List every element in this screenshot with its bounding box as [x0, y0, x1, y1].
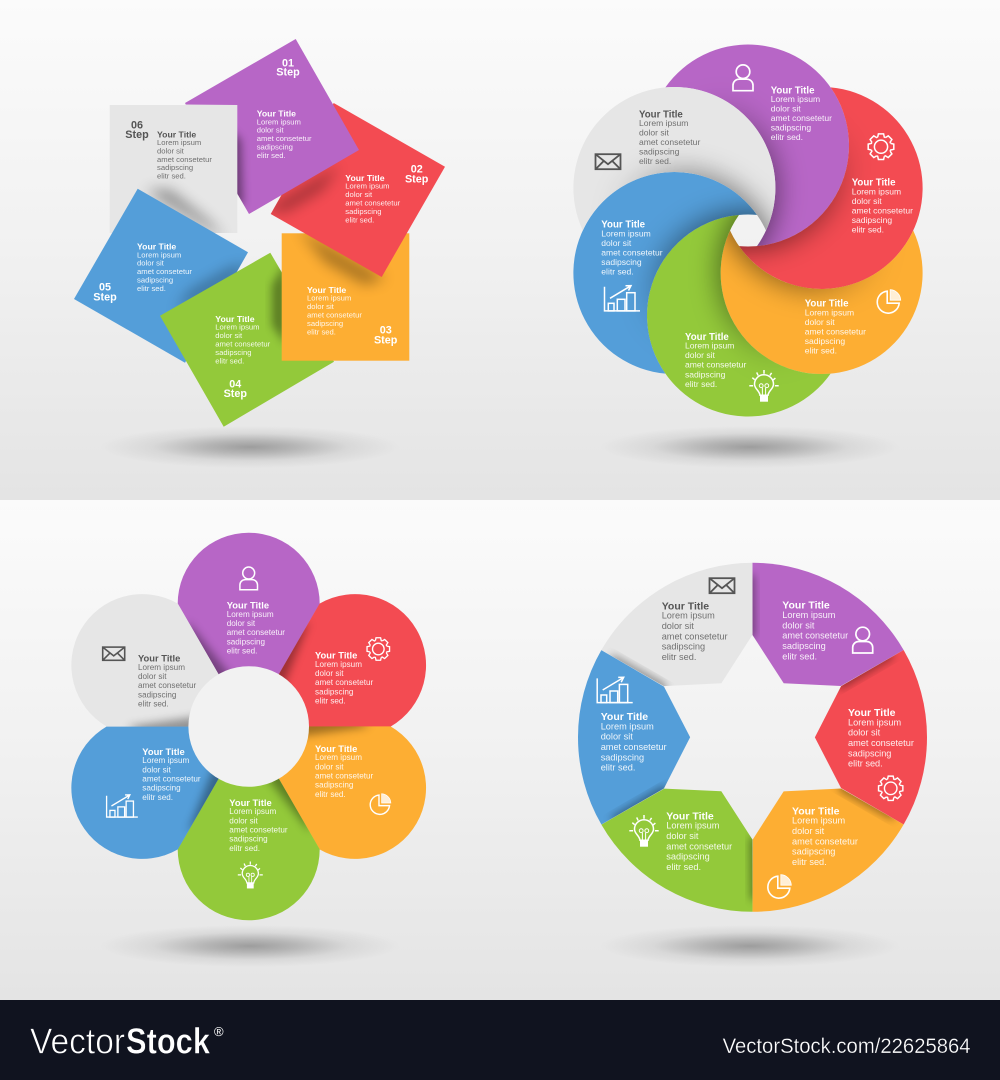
ring text: red: elitr sed.	[848, 759, 883, 769]
petal text: green: elitr sed.	[229, 844, 260, 853]
swirl segment: green: Your Title	[685, 332, 729, 343]
swirl segment: blue: sadipscing	[601, 257, 642, 267]
swirl segment: purple: Your Title	[771, 85, 815, 96]
petal text: purple: elitr sed.	[227, 647, 257, 656]
swirl segment: grey: dolor sit	[639, 127, 670, 137]
icon: gear	[879, 776, 903, 800]
swirl segment: purple: dolor sit	[771, 103, 801, 113]
petal: orange	[279, 726, 426, 859]
petal text: grey: Your Title	[138, 653, 180, 664]
step 05 blue square: 05	[99, 282, 111, 294]
step 04 green square: 04	[229, 379, 241, 391]
icon: light bulb	[749, 370, 779, 402]
ring text: grey: Lorem ipsum	[662, 611, 715, 621]
icon: light bulb	[629, 815, 659, 847]
ring segment: red	[814, 650, 927, 824]
swirl segment: red: dolor sit	[852, 196, 882, 206]
ring text: purple: elitr sed.	[782, 651, 817, 661]
ring text: green: elitr sed.	[666, 862, 701, 872]
petal text: grey: amet consetetur	[138, 681, 197, 690]
swirl segment: blue	[573, 172, 757, 374]
swirl segment: green: dolor sit	[685, 350, 716, 360]
step 04 green square: dolor sit	[215, 331, 243, 340]
ring text: orange: Your Title	[792, 805, 840, 817]
ring text: orange: amet consetetur	[792, 836, 858, 846]
step 05 blue square: Your Title	[137, 242, 176, 252]
petal text: orange: Lorem ipsum	[315, 753, 362, 762]
step 06 grey overlap and text: Lorem ipsum	[157, 138, 201, 147]
step 06 grey overlap and text: dolor sit	[157, 146, 185, 155]
step 05 blue square: Step	[93, 291, 117, 303]
swirl segment: orange	[720, 230, 923, 374]
ring text: blue: dolor sit	[601, 732, 633, 742]
ring text: green: Lorem ipsum	[666, 821, 720, 831]
footer logo: ®	[214, 1024, 224, 1039]
step 05 blue square: amet consetetur	[137, 267, 192, 276]
icon: bar chart	[604, 286, 640, 311]
step 04 green square: sadipscing	[215, 348, 251, 357]
step 03 orange square: elitr sed.	[307, 327, 336, 336]
ring text: red: sadipscing	[848, 748, 891, 758]
swirl segment: red: Lorem ipsum	[852, 186, 901, 196]
icon: user	[853, 627, 873, 653]
petal text: green: Lorem ipsum	[229, 807, 276, 816]
icon: bar chart	[597, 677, 633, 703]
petal text: blue: Your Title	[142, 746, 185, 757]
icon: gear	[868, 134, 894, 160]
step 02 red square: amet consetetur	[345, 198, 401, 207]
icon: pie chart	[370, 794, 391, 814]
petal text: orange: dolor sit	[315, 762, 344, 771]
floor shadow: top right	[600, 426, 900, 468]
icon: bar chart	[107, 795, 138, 817]
ring text: red: amet consetetur	[848, 738, 914, 748]
petal text: red: sadipscing	[315, 687, 353, 696]
step 03 orange square: Step	[374, 334, 398, 346]
step 06 grey overlap and text: elitr sed.	[157, 172, 186, 181]
step 05 blue square: dolor sit	[137, 259, 165, 268]
ring text: green: amet consetetur	[666, 841, 732, 851]
panel: segmented ring	[578, 562, 927, 912]
icon: gear	[367, 638, 390, 660]
step 04 green square: Your Title	[215, 314, 255, 324]
ring text: purple: amet consetetur	[782, 631, 848, 641]
floor shadow: top left	[100, 426, 400, 468]
ring text: orange: elitr sed.	[792, 857, 827, 867]
petal text: green: sadipscing	[229, 835, 268, 844]
swirl segment: grey	[574, 87, 776, 230]
footer url: VectorStock.com/22625864	[723, 1035, 971, 1058]
step 02 red square: 02	[411, 164, 423, 176]
step 03 orange square: amet consetetur	[307, 310, 362, 319]
footer logo	[30, 1020, 224, 1061]
icon: user	[733, 65, 753, 91]
petal text: grey: sadipscing	[138, 690, 176, 699]
ring text: red: Lorem ipsum	[848, 717, 901, 727]
swirl segment: orange: Lorem ipsum	[805, 307, 854, 317]
swirl segment: blue: amet consetetur	[601, 247, 663, 257]
step 01 purple square: Your Title	[257, 109, 296, 119]
ring text: purple: Your Title	[782, 600, 830, 612]
swirl segment: orange: Your Title	[805, 299, 849, 310]
step 01 purple square: elitr sed.	[257, 151, 286, 160]
step 06 grey overlap and text: Your Title	[157, 129, 196, 139]
swirl segment: orange: amet consetetur	[805, 326, 866, 336]
ring text: blue: Lorem ipsum	[601, 721, 654, 731]
step 04 green square	[160, 253, 334, 427]
step 03 orange square: sadipscing	[307, 319, 343, 328]
ring text: red: dolor sit	[848, 728, 881, 738]
floor shadow: bottom left	[100, 925, 400, 967]
ring text: orange: sadipscing	[792, 847, 835, 857]
icon: pie chart	[877, 290, 901, 313]
swirl segment: green: Lorem ipsum	[685, 341, 734, 351]
petal text: green: amet consetetur	[229, 826, 288, 835]
swirl segment: red	[739, 87, 923, 289]
petal text: orange: Your Title	[315, 743, 357, 754]
swirl segment: blue: Your Title	[601, 220, 646, 231]
swirl segment: red: amet consetetur	[852, 205, 913, 215]
ring segment: purple	[745, 563, 904, 686]
petal text: orange: amet consetetur	[315, 772, 374, 781]
step 03 orange square: Your Title	[307, 285, 346, 295]
swirl segment: orange: dolor sit	[805, 317, 835, 327]
ring text: blue: sadipscing	[601, 752, 644, 762]
step 02 red square	[265, 103, 445, 277]
step 03 orange square: dolor sit	[307, 302, 335, 311]
step 05 blue square: Lorem ipsum	[137, 250, 181, 259]
petal: purple	[178, 532, 320, 674]
petal text: grey: elitr sed.	[138, 700, 169, 709]
step 03 orange square: Lorem ipsum	[307, 294, 351, 303]
petal text: blue: amet consetetur	[142, 775, 201, 784]
ring text: green: sadipscing	[666, 852, 710, 862]
petal text: blue: elitr sed.	[142, 793, 173, 802]
ring text: blue: Your Title	[601, 711, 648, 723]
step 04 green square: Lorem ipsum	[215, 323, 260, 332]
icon: light bulb	[238, 862, 263, 888]
background: top half	[0, 0, 1000, 500]
swirl segment: red: sadipscing	[852, 215, 892, 225]
petal: green	[178, 778, 320, 920]
step 06 grey square	[110, 105, 237, 240]
petal text: grey: dolor sit	[138, 672, 167, 681]
petal text: purple: dolor sit	[227, 619, 256, 628]
step 05 blue square: elitr sed.	[137, 284, 166, 293]
swirl segment: green	[647, 215, 830, 416]
ring text: purple: sadipscing	[782, 641, 826, 651]
swirl segment: blue: dolor sit	[601, 238, 632, 248]
step 05 blue square: sadipscing	[137, 276, 173, 285]
swirl segment: red: elitr sed.	[852, 225, 884, 235]
petal text: red: Your Title	[315, 650, 357, 661]
swirl segment: purple	[666, 44, 849, 246]
step 06 grey overlap and text: 06	[131, 120, 143, 132]
step 04 green square: amet consetetur	[215, 339, 271, 348]
step 02 red square: dolor sit	[345, 190, 373, 199]
step 06 grey overlap and text: Step	[125, 129, 149, 141]
swirl segment: purple: Lorem ipsum	[771, 94, 820, 104]
swirl segment: grey: Lorem ipsum	[639, 118, 688, 128]
step 02 red square: elitr sed.	[345, 215, 374, 224]
petal text: orange: sadipscing	[315, 781, 353, 790]
ring text: grey: sadipscing	[662, 642, 705, 652]
petal text: grey: Lorem ipsum	[138, 663, 185, 672]
ring text: grey: Your Title	[662, 600, 709, 612]
step 05 blue square	[74, 189, 255, 363]
ring segment: blue	[578, 650, 690, 824]
background: bottom half	[0, 500, 1000, 1000]
petal text: red: elitr sed.	[315, 697, 346, 706]
step 04 green square: Step	[224, 388, 247, 400]
step 06 grey overlap and text: sadipscing	[157, 163, 193, 172]
step 02 red square: sadipscing	[345, 207, 381, 216]
centre circle	[188, 666, 309, 787]
swirl segment: purple: elitr sed.	[771, 132, 803, 142]
step 04 green square: elitr sed.	[215, 356, 244, 365]
petal text: blue: sadipscing	[142, 784, 181, 793]
ring segment: grey	[602, 562, 752, 686]
step 02 red square: Your Title	[345, 173, 385, 183]
petal text: red: Lorem ipsum	[315, 660, 362, 669]
step 03 orange square: 03	[380, 325, 392, 337]
petal text: green: dolor sit	[229, 816, 258, 825]
icon: envelope	[103, 647, 125, 660]
ring text: green: dolor sit	[666, 831, 699, 841]
petal text: purple: sadipscing	[227, 637, 265, 646]
icon: pie chart	[768, 875, 791, 898]
floor shadow: bottom right	[600, 925, 900, 967]
swirl segment: orange: elitr sed.	[805, 346, 837, 356]
ring segment: green	[601, 789, 760, 912]
step 01 purple square	[185, 39, 359, 214]
swirl segment: purple: amet consetetur	[771, 113, 832, 123]
petal text: purple: Your Title	[227, 600, 269, 611]
step 01 purple square: sadipscing	[257, 143, 293, 152]
ring text: orange: dolor sit	[792, 826, 825, 836]
icon: envelope	[596, 154, 620, 169]
ring text: blue: elitr sed.	[601, 763, 635, 773]
step 01 purple square: Lorem ipsum	[257, 117, 301, 126]
petal text: orange: elitr sed.	[315, 790, 346, 799]
step 03 orange square	[282, 228, 409, 361]
step 02 red square: Step	[405, 173, 429, 185]
petal text: blue: dolor sit	[142, 765, 171, 774]
ring text: green: Your Title	[666, 810, 714, 822]
ring text: purple: dolor sit	[782, 620, 815, 630]
swirl segment: blue: Lorem ipsum	[601, 228, 651, 238]
ring text: red: Your Title	[848, 707, 896, 719]
icon: envelope	[710, 578, 734, 593]
ring text: grey: elitr sed.	[662, 652, 696, 662]
petal text: purple: Lorem ipsum	[227, 610, 274, 619]
swirl segment: red: Your Title	[852, 178, 896, 189]
petal: blue	[71, 726, 219, 859]
swirl segment: grey: elitr sed.	[639, 156, 671, 166]
step 06 grey overlap and text: amet consetetur	[157, 155, 212, 164]
ring segment: orange	[752, 788, 904, 912]
ring text: blue: amet consetetur	[601, 742, 667, 752]
swirl segment: green: amet consetetur	[685, 360, 746, 370]
swirl segment: orange: sadipscing	[805, 336, 845, 346]
ring text: purple: Lorem ipsum	[782, 610, 836, 620]
swirl segment: blue: elitr sed.	[601, 267, 634, 277]
swirl segment: green: elitr sed.	[685, 379, 717, 389]
step 06 grey overlap and text	[125, 104, 237, 196]
swirl segment: green: sadipscing	[685, 369, 726, 379]
swirl segment: grey: Your Title	[639, 109, 683, 120]
petal text: blue: Lorem ipsum	[142, 756, 189, 765]
step 01 purple square: Step	[276, 67, 300, 79]
icon: user	[240, 567, 258, 590]
step 01 purple square: dolor sit	[257, 126, 284, 135]
ring text: grey: amet consetetur	[662, 631, 728, 641]
petal text: purple: amet consetetur	[227, 628, 285, 637]
panel: flower of petals	[71, 532, 426, 920]
petal: grey	[72, 594, 218, 727]
ring text: orange: Lorem ipsum	[792, 816, 845, 826]
petal text: red: amet consetetur	[315, 678, 374, 687]
petal: red	[278, 594, 426, 726]
petal text: red: dolor sit	[315, 669, 344, 678]
footer logo: Stock	[126, 1020, 211, 1061]
footer bar	[0, 1000, 1000, 1080]
swirl segment: grey: amet consetetur	[639, 137, 700, 147]
panel: swirl of overlapping circles	[569, 40, 927, 420]
step 02 red square: Lorem ipsum	[345, 182, 390, 191]
footer logo: Vector	[30, 1020, 125, 1061]
swirl segment: purple: sadipscing	[771, 123, 811, 133]
step 01 purple square: amet consetetur	[257, 134, 312, 143]
petal text: green: Your Title	[229, 797, 272, 808]
swirl segment: grey: sadipscing	[639, 147, 680, 157]
step 01 purple square: 01	[282, 57, 294, 69]
ring text: grey: dolor sit	[662, 621, 694, 631]
panel: rotated square steps	[74, 39, 445, 427]
